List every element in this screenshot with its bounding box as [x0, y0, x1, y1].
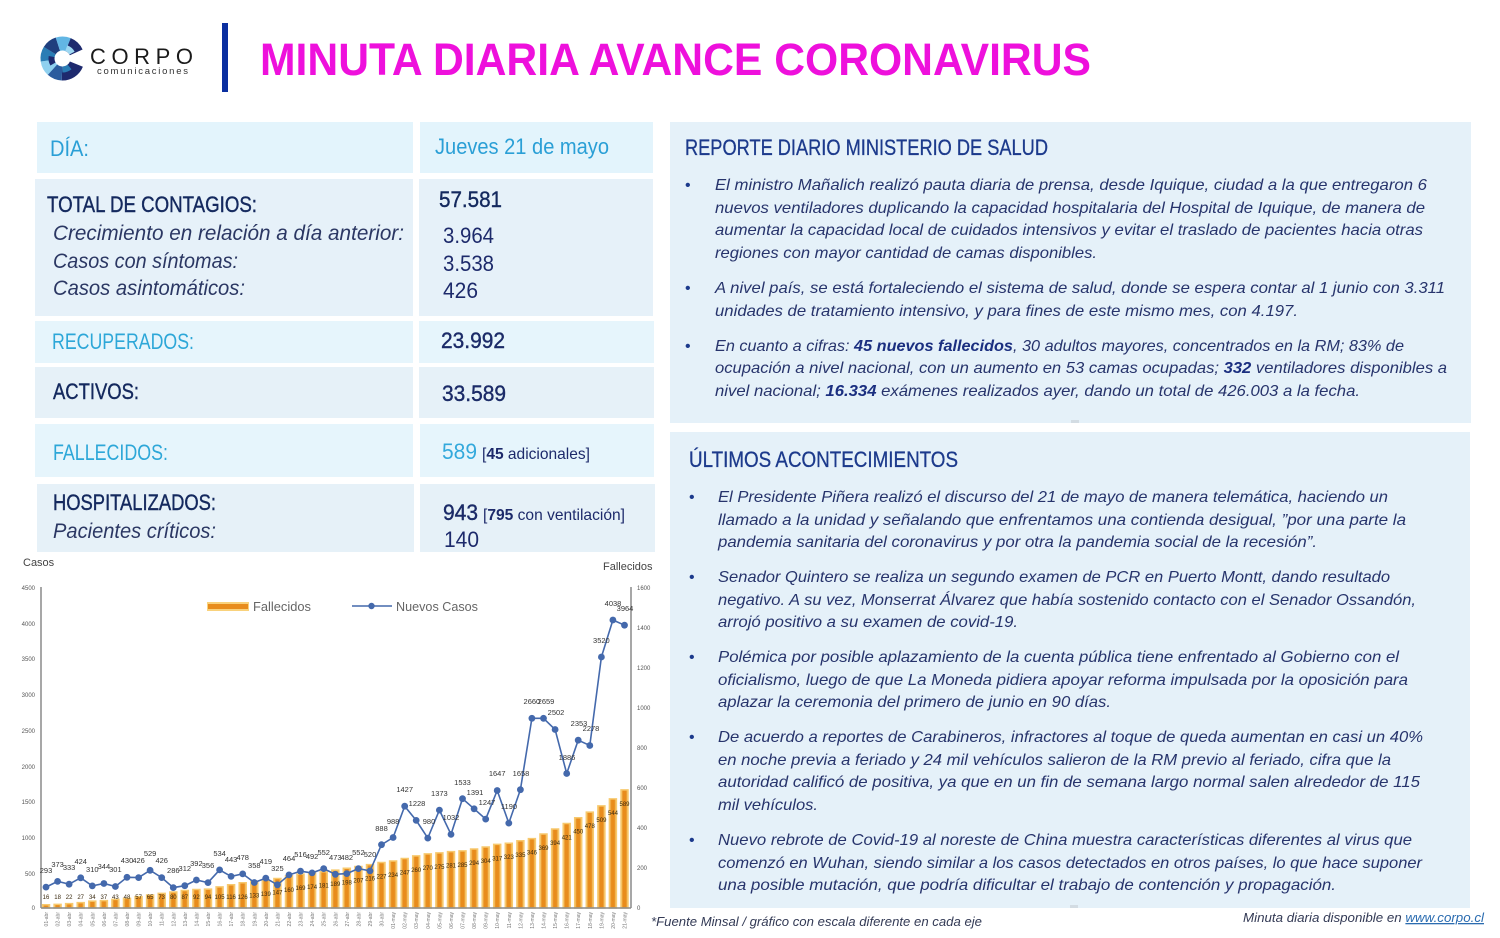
bars: fallecidos [42, 790, 628, 908]
bullet: pauta en Iquique: regiones con mayor cantidad de camas disponibles. [715, 245, 1097, 262]
line labels: nuevos casos: 430 [121, 856, 133, 865]
date labels: 16-abr [218, 912, 224, 926]
panel: últimos acontecimientos [670, 432, 1470, 908]
axis title: fallecidos: Fallecidos [603, 561, 653, 573]
line labels: nuevos casos: 1247 [479, 798, 495, 807]
bar labels: fallecidos: 27 [77, 895, 85, 901]
left axis: 4500 [22, 586, 36, 592]
bullet: pauta en Iquique: • [685, 177, 691, 194]
line labels: nuevos casos: 482 [341, 853, 353, 862]
bullet: toque de queda: autoridad calificó de positiva, ya que en un fin de semana largo normal salen alrededor de 115 [718, 774, 1420, 791]
left axis: 2500 [22, 729, 36, 735]
bar labels: fallecidos: 304 [481, 859, 491, 865]
row: fallecidos [35, 424, 654, 477]
bar labels: fallecidos: 234 [388, 873, 399, 879]
row: total de contagios: 426 [443, 278, 478, 303]
line labels: nuevos casos: 3964 [617, 604, 633, 613]
date labels: 04-abr [79, 912, 85, 926]
row: activos: ACTIVOS: [53, 379, 139, 404]
date labels: 26-abr [333, 912, 339, 926]
line labels: nuevos casos: 333 [63, 863, 75, 872]
title: MINUTA DIARIA AVANCE CORONAVIRUS [260, 34, 1091, 85]
right axis: 600 [637, 786, 648, 792]
bar labels: fallecidos: 43 [112, 895, 119, 901]
line labels: nuevos casos: 358 [248, 861, 261, 870]
line labels: nuevos casos: 2659 [538, 697, 554, 706]
row: día: DÍA: [50, 136, 89, 161]
date labels: 17-may [576, 912, 582, 929]
bullet: sistema de salud [685, 280, 1445, 320]
date labels: 05-abr [90, 912, 96, 926]
bar labels: fallecidos: 294 [469, 861, 480, 867]
left axis: 1000 [22, 836, 36, 842]
line labels: nuevos casos: 520 [364, 850, 376, 859]
bar labels: fallecidos: 34 [89, 895, 96, 901]
row: total de contagios: TOTAL DE CONTAGIOS: [47, 192, 257, 217]
date labels: 20-abr [264, 912, 270, 926]
bar labels: fallecidos: 317 [492, 856, 503, 862]
date labels: 21-abr [275, 912, 281, 926]
right axis: 1600 [637, 586, 651, 592]
row: activos: 33.589 [442, 381, 506, 406]
row: total de contagios: Crecimiento en relación a día anterior: [53, 222, 404, 245]
bar labels: fallecidos: 589 [619, 802, 630, 808]
chart: casos nuevos y fallecidos [22, 557, 653, 929]
row: fallecidos: FALLECIDOS: [53, 440, 168, 465]
date labels: 27-abr [345, 912, 351, 926]
bar labels: fallecidos: 189 [330, 882, 341, 888]
bullet: toque de queda [689, 729, 1423, 814]
bullet: cuenta pública: aplazar la ceremonia del primero de junio en 90 días. [718, 694, 1111, 711]
line labels: nuevos casos: 310 [86, 865, 99, 874]
bar labels: fallecidos: 92 [193, 895, 200, 901]
bullet: cuenta pública [689, 649, 1408, 711]
line labels: nuevos casos: 1427 [396, 785, 413, 794]
line labels: nuevos casos: 2660 [524, 697, 540, 706]
line labels: nuevos casos: 426 [155, 856, 168, 865]
legend: fallecidos: Fallecidos [253, 599, 311, 614]
bar labels: fallecidos: 281 [446, 864, 457, 870]
date labels: 15-abr [206, 912, 212, 926]
bullet: cuenta pública: oficialismo, luego de que La Moneda pidiera apoyar reforma impulsada por la oposición para [718, 672, 1408, 689]
logo: Corpo Comunicaciones: comunicaciones [97, 66, 188, 77]
bar labels: fallecidos: 73 [158, 895, 166, 901]
bar labels: fallecidos: 335 [515, 853, 526, 859]
line labels: nuevos casos: 4038 [605, 599, 621, 608]
line labels: nuevos casos: 426 [132, 856, 145, 865]
right axis: 200 [637, 866, 648, 872]
row: hospitalizados: [795 con ventilación] [483, 507, 625, 524]
row: recuperados [35, 321, 654, 363]
date labels: 01-abr [44, 912, 50, 926]
bar labels: fallecidos: 37 [101, 895, 108, 901]
bar labels: fallecidos: 285 [457, 863, 468, 869]
date labels: 02-abr [56, 912, 62, 926]
bullet: rebrote en China: • [689, 832, 695, 849]
date labels: 14-abr [194, 912, 200, 926]
bullet: discurso presidente [689, 489, 1406, 551]
date labels: 09-may [484, 912, 490, 929]
date labels: 07-may [460, 912, 466, 929]
date labels: 05-may [437, 912, 443, 929]
bar labels: fallecidos: 421 [562, 836, 572, 842]
legend: fallecidos [207, 599, 311, 614]
left axis: 4000 [22, 622, 36, 628]
line labels: nuevos casos: 1032 [443, 813, 459, 822]
bullet: toque de queda: • [689, 729, 695, 746]
date labels: 21-may [622, 912, 628, 929]
row: hospitalizados: HOSPITALIZADOS: [53, 490, 216, 515]
line labels: nuevos casos: 988 [387, 817, 399, 826]
bar labels: fallecidos: 169 [295, 886, 306, 892]
right axis: 0 [637, 906, 641, 912]
bullet: toque de queda: en noche previa a feriado y 24 mil vehículos salieron de la RM previo al feriado, cifra que la [718, 752, 1391, 769]
left axis: 2000 [22, 765, 36, 771]
left axis: 1500 [22, 800, 36, 806]
line labels: nuevos casos: 1647 [489, 769, 506, 778]
bullet: pauta en Iquique [685, 177, 1427, 262]
bullet: discurso presidente: • [689, 489, 695, 506]
bar labels: fallecidos: 87 [181, 895, 189, 901]
date labels: 03-abr [67, 912, 73, 926]
row: día [37, 122, 653, 173]
line labels: nuevos casos: 478 [236, 853, 249, 862]
date labels: 12-may [518, 912, 524, 929]
logo: Corpo Comunicaciones: CORPO [90, 44, 193, 69]
date labels: 10-may [495, 912, 501, 929]
bar labels: fallecidos: 198 [342, 880, 352, 886]
bullet: cuenta pública: Polémica por posible aplazamiento de la cuenta pública tiene enfrentado al Gobierno con el [718, 649, 1399, 666]
line labels: nuevos casos: 552 [352, 848, 365, 857]
bullet: toque de queda: De acuerdo a reportes de Carabineros, infractores al toque de queda aumentan en casi un 40% [718, 729, 1423, 746]
row: hospitalizados: 943 [443, 500, 478, 525]
bullet: sistema de salud: unidades de tratamiento intensivo, y para fines de este mismo mes, con 4.197. [715, 303, 1298, 320]
bullet: cuenta pública: • [689, 649, 695, 666]
bar labels: fallecidos: 544 [608, 811, 619, 817]
bullet: pauta en Iquique: aumentar la capacidad local de cuidados intensivos y evitar el traslado de pacientes hacia otras [715, 222, 1423, 239]
row: fallecidos: [45 adicionales] [482, 446, 590, 463]
bullet: discurso presidente: El Presidente Piñera realizó el discurso del 21 de mayo de manera telemática, haciendo un [718, 489, 1388, 506]
bar labels: fallecidos: 116 [226, 895, 237, 901]
bullet: rebrote en China: una posible mutación, que podría dificultar el trabajo de contención y propagación. [718, 877, 1336, 894]
bullet: senador Quintero: negativo. A su vez, Monserrat Álvarez que había sostenido contacto con el Senador Ossandón, [718, 590, 1416, 609]
line labels: nuevos casos: 1190 [501, 802, 517, 811]
right axis: 1400 [637, 626, 651, 632]
date labels: 29-abr [368, 912, 374, 926]
bar labels: fallecidos: 369 [538, 846, 549, 852]
date labels: 20-may [611, 912, 617, 929]
date labels: 28-abr [356, 912, 362, 926]
line labels: nuevos casos: 534 [213, 849, 226, 858]
bar labels: fallecidos: 216 [365, 877, 376, 883]
left axis: 3000 [22, 693, 36, 699]
bar labels: fallecidos: 94 [205, 895, 212, 901]
right axis: 1000 [637, 706, 651, 712]
line labels: nuevos casos: 980 [423, 817, 435, 826]
date labels: 22-abr [287, 912, 293, 926]
bar labels: fallecidos: 48 [124, 895, 131, 901]
line labels: nuevos casos: 1886 [559, 753, 575, 762]
line labels: nuevos casos: 464 [283, 854, 295, 863]
line labels: nuevos casos: 286 [167, 866, 180, 875]
row: activos [35, 367, 654, 418]
line labels: nuevos casos: 2278 [583, 724, 599, 733]
right axis: 400 [637, 826, 648, 832]
bar labels: fallecidos: 139 [261, 892, 271, 898]
bullet: senador Quintero: Senador Quintero se realiza un segundo examen de PCR en Puerto Montt, dando resultado [718, 569, 1390, 586]
line labels: nuevos casos: 2353 [571, 719, 587, 728]
date labels: 08-may [472, 912, 478, 929]
date labels: 09-abr [137, 912, 143, 926]
line labels: nuevos casos: 516 [294, 850, 307, 859]
bar labels: fallecidos: 450 [573, 830, 584, 836]
bar labels: fallecidos [43, 802, 630, 901]
bar labels: fallecidos: 478 [585, 824, 595, 830]
line labels: nuevos casos: 419 [260, 857, 272, 866]
bar labels: fallecidos: 323 [504, 855, 514, 861]
line labels: nuevos casos: 3520 [593, 636, 610, 645]
date labels: 06-abr [102, 912, 108, 926]
bar labels: fallecidos: 394 [550, 841, 561, 847]
right axis: 800 [637, 746, 648, 752]
footnote: minuta disponible: Minuta diaria disponible en www.corpo.cl [1243, 910, 1485, 925]
date labels: 14-may [542, 912, 548, 929]
bar labels: fallecidos: 174 [307, 885, 318, 891]
line labels: nuevos casos: 888 [375, 824, 388, 833]
logo: Corpo Comunicaciones [41, 37, 193, 80]
date labels: 19-abr [252, 912, 258, 926]
date labels: 08-abr [125, 912, 131, 926]
axis title: casos: Casos [23, 557, 55, 569]
right axis [631, 586, 651, 912]
bullet: sistema de salud: A nivel país, se está fortaleciendo el sistema de salud, donde se espera contar al 1 junio con 3.311 [714, 280, 1445, 297]
bar labels: fallecidos: 133 [249, 893, 260, 899]
line labels: nuevos casos: 473 [329, 853, 342, 862]
line labels: nuevos casos: 325 [271, 864, 284, 873]
right axis: 1200 [637, 666, 651, 672]
bullet: discurso presidente: pandemia sanitaria del coronavirus y por otra la pandemia social de la recesión”. [717, 534, 1317, 551]
panel: reporte diario ministerio de salud [670, 122, 1471, 423]
footnote: fuente: *Fuente Minsal / gráfico con escala diferente en cada eje [651, 914, 982, 929]
bullet: discurso presidente: llamado a la unidad y señalando que enfrentamos una contienda desigual, ”por una parte la [718, 512, 1406, 529]
line labels: nuevos casos: 2502 [548, 708, 564, 717]
bar labels: fallecidos: 126 [238, 895, 248, 901]
bullet: senador Quintero: arrojó positivo a su examen de covid-19. [718, 614, 1018, 631]
date labels: 11-may [507, 912, 513, 928]
bar labels: fallecidos: 57 [135, 895, 143, 901]
bullet: rebrote en China: Nuevo rebrote de Covid-19 al noreste de China muestra características diferentes al virus que [718, 832, 1412, 849]
legend: nuevos casos: Nuevos Casos [396, 599, 478, 614]
line labels: nuevos casos: 552 [317, 848, 330, 857]
bullet: pauta en Iquique: nuevos ventiladores duplicando la capacidad hospitalaria del Hospital de Iquique, de manera de [715, 200, 1425, 217]
date labels: 10-abr [148, 912, 154, 926]
left axis: 0 [32, 906, 36, 912]
left axis: 3500 [22, 657, 36, 663]
bullet: toque de queda: mil vehículos. [718, 797, 818, 814]
bullet: sistema de salud: • [685, 280, 691, 297]
line labels: nuevos casos: 301 [109, 865, 122, 874]
bar labels: fallecidos: 227 [376, 874, 387, 880]
date labels: 17-abr [229, 912, 235, 926]
bar labels: fallecidos: 65 [147, 895, 154, 901]
row: total de contagios: 57.581 [439, 187, 502, 212]
bullet: pauta en Iquique: El ministro Mañalich realizó pauta diaria de prensa, desde Iquique, ciudad a la que entregaron 6 [715, 177, 1427, 194]
line labels: nuevos casos: 529 [144, 849, 156, 858]
line labels: nuevos casos: 312 [179, 864, 191, 873]
date labels: 13-may [530, 912, 536, 929]
date labels: 11-abr [160, 912, 166, 926]
line labels: nuevos casos: 424 [74, 857, 87, 866]
date labels: 03-may [414, 912, 420, 929]
bullet: cifras: ocupación a nivel nacional, con un aumento en 53 camas ocupadas; 332 ventiladores disponibles a [715, 360, 1447, 377]
date labels: 24-abr [310, 912, 316, 926]
bar labels: fallecidos: 160 [284, 888, 295, 894]
row: recuperados: RECUPERADOS: [52, 329, 194, 354]
bullet: cifras: nivel nacional; 16.334 exámenes realizados ayer, dando un total de 426.003 a la fecha. [715, 383, 1360, 400]
row: total de contagios: Casos asintomáticos: [53, 277, 245, 300]
row: total de contagios [35, 179, 653, 316]
date labels: 02-may [403, 912, 409, 929]
date labels: 25-abr [322, 912, 328, 926]
line labels: nuevos casos: 373 [51, 860, 64, 869]
heading: reporte diario: REPORTE DIARIO MINISTERIO DE SALUD [685, 135, 1048, 160]
line labels: nuevos casos [40, 599, 633, 875]
bar labels: fallecidos: 247 [400, 870, 410, 876]
date labels: 30-abr [380, 912, 386, 926]
bullet: rebrote en China: comenzó en Wuhan, siendo similar a los casos detectados en otros países, lo que hace suponer [718, 855, 1423, 872]
date labels: 23-abr [298, 912, 304, 926]
row: hospitalizados: 140 [444, 527, 479, 552]
date labels: 12-abr [171, 912, 177, 926]
date labels: 19-may [599, 912, 605, 929]
date labels: 01-may [391, 912, 397, 929]
bullet: senador Quintero [689, 569, 1416, 631]
row: hospitalizados: Pacientes críticos: [53, 520, 216, 543]
bullet: cifras [685, 338, 1447, 400]
row: recuperados: 23.992 [441, 328, 505, 353]
date labels: 18-abr [241, 912, 247, 926]
date labels: 13-abr [183, 912, 189, 926]
heading: últimos acontecimientos: ÚLTIMOS ACONTECIMIENTOS [689, 447, 958, 472]
bar labels: fallecidos: 207 [353, 878, 364, 884]
bar labels: fallecidos: 275 [434, 865, 445, 871]
date labels [44, 912, 628, 929]
bar labels: fallecidos: 270 [423, 866, 433, 872]
bar labels: fallecidos: 80 [170, 895, 177, 901]
row: día: Jueves 21 de mayo [435, 134, 609, 159]
line labels: nuevos casos: 1228 [409, 799, 425, 808]
bullet: cifras: • [685, 338, 691, 355]
bar labels: fallecidos: 105 [215, 895, 225, 901]
date labels: 07-abr [113, 912, 119, 926]
row: fallecidos: 589 [442, 439, 477, 464]
bar labels: fallecidos: 181 [319, 884, 329, 890]
line labels: nuevos casos: 1373 [431, 789, 448, 798]
line labels: nuevos casos: 492 [306, 852, 318, 861]
line labels: nuevos casos: 1658 [513, 769, 529, 778]
left axis: 500 [25, 872, 36, 878]
table: daily figures [35, 122, 655, 552]
bar labels: fallecidos: 22 [66, 895, 73, 901]
row: total de contagios: 3.538 [443, 251, 494, 276]
date labels: 06-may [449, 912, 455, 929]
date labels: 18-may [588, 912, 594, 929]
line labels: nuevos casos: 1391 [467, 788, 483, 797]
bullet: senador Quintero: • [689, 569, 695, 586]
bar labels: fallecidos: 147 [272, 890, 283, 896]
line labels: nuevos casos: 392 [190, 859, 203, 868]
divider bar [222, 23, 228, 92]
line: nuevos casos [43, 617, 628, 891]
line labels: nuevos casos: 443 [225, 855, 237, 864]
bar labels: fallecidos: 18 [54, 895, 62, 901]
baseline [41, 907, 631, 909]
bar labels: fallecidos: 260 [411, 868, 422, 874]
left axis [22, 586, 41, 912]
row: total de contagios: Casos con síntomas: [53, 250, 238, 273]
row: hospitalizados [37, 484, 655, 552]
bullet: rebrote en China [689, 832, 1423, 894]
line labels: nuevos casos: 293 [40, 866, 52, 875]
date labels: 15-may [553, 912, 559, 929]
date labels: 04-may [426, 912, 432, 929]
legend: nuevos casos [352, 599, 478, 614]
row: total de contagios: 3.964 [443, 223, 494, 248]
bullet: cifras: En cuanto a cifras: 45 nuevos fallecidos, 30 adultos mayores, concentrados en la RM; 83% de [715, 338, 1404, 355]
line labels: nuevos casos: 356 [202, 861, 214, 870]
date labels: 16-may [565, 912, 571, 929]
bar labels: fallecidos: 346 [527, 851, 538, 857]
line labels: nuevos casos: 344 [98, 862, 110, 871]
line labels: nuevos casos: 1533 [454, 778, 471, 787]
bar labels: fallecidos: 16 [43, 895, 50, 901]
bar labels: fallecidos: 509 [596, 818, 607, 824]
